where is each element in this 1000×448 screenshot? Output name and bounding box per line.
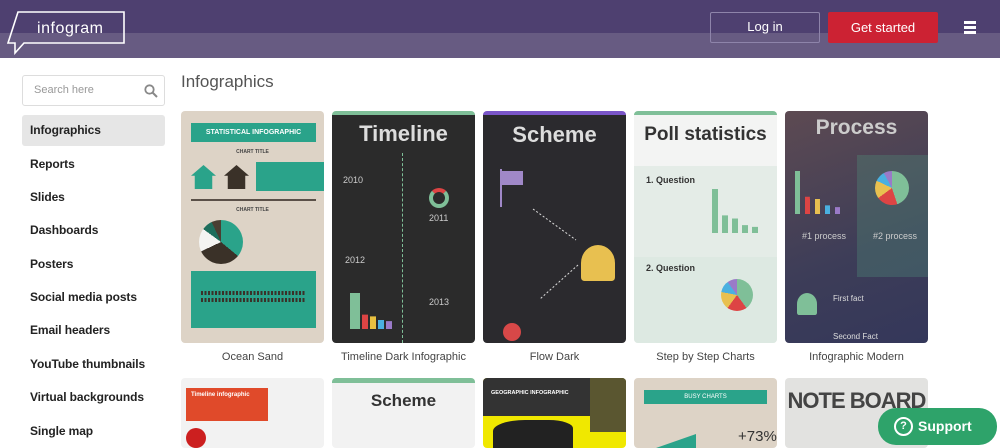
sidebar nav: YouTube thumbnails [30, 357, 145, 371]
heading: Infographics [181, 72, 274, 91]
card: timeline dark [332, 111, 475, 343]
card: timeline dark: 2013 [429, 297, 449, 307]
search box [22, 75, 165, 106]
card: process: First fact [833, 294, 864, 303]
icon: help [894, 417, 913, 436]
card: geographic: GEOGRAPHIC INFOGRAPHIC [491, 390, 569, 396]
card: timeline infographic: Timeline infographic [191, 392, 250, 398]
card: scheme: Scheme [371, 391, 436, 410]
card: busy charts: +73% [738, 428, 777, 445]
card: ocean sand: CHART TITLE [236, 149, 269, 155]
card: poll statistics: 1. Question [646, 175, 695, 185]
caption: timeline: Timeline Dark Infographic [341, 351, 466, 363]
card: ocean sand: STATISTICAL INFOGRAPHIC [206, 129, 301, 136]
card: timeline dark: 2012 [345, 255, 365, 265]
card: poll statistics: Poll statistics [644, 124, 767, 145]
card: process [785, 111, 928, 343]
card: timeline dark: 2010 [343, 175, 363, 185]
search box: Search here [34, 84, 94, 96]
caption: flow dark: Flow Dark [530, 351, 579, 363]
support button: Support [918, 418, 972, 434]
sidebar nav [22, 115, 165, 438]
sidebar nav: Social media posts [30, 290, 137, 304]
button: log in: Log in [747, 19, 783, 34]
icon: help: ? [900, 420, 907, 432]
card: geographic [483, 378, 626, 448]
header bar [0, 0, 1000, 58]
sidebar nav: Reports [30, 157, 75, 171]
card: poll statistics: 2. Question [646, 263, 695, 273]
sidebar nav: Dashboards [30, 223, 98, 237]
caption: process: Infographic Modern [809, 351, 904, 363]
sidebar nav: Slides [30, 190, 65, 204]
card: flow dark [483, 111, 626, 343]
sidebar nav: Virtual backgrounds [30, 390, 144, 404]
caption: ocean sand: Ocean Sand [222, 351, 283, 363]
caption: poll: Step by Step Charts [656, 351, 755, 363]
card: process: Process [816, 116, 897, 139]
card: timeline infographic [181, 378, 324, 448]
card: process: Second Fact [833, 332, 878, 341]
logo [6, 11, 125, 55]
card: note board [785, 378, 928, 448]
card: flow dark: Scheme [512, 122, 597, 147]
row 2 cards [181, 378, 928, 448]
sidebar nav: Single map [30, 424, 93, 438]
card: timeline dark: Timeline [359, 121, 448, 146]
icon: menu [964, 21, 976, 34]
card: timeline dark: 2011 [429, 213, 448, 223]
card: process: #1 process [802, 231, 846, 241]
card: ocean sand: CHART TITLE [236, 207, 269, 213]
card: scheme [332, 378, 475, 448]
sidebar nav: Posters [30, 257, 73, 271]
button: log in [710, 12, 820, 43]
button: get started [828, 12, 938, 43]
logo: infogram [37, 20, 103, 37]
support button [878, 408, 997, 445]
card: process: #2 process [873, 231, 917, 241]
card: ocean sand [181, 111, 324, 343]
card: poll statistics [634, 111, 777, 343]
button: get started: Get started [851, 20, 915, 35]
card: busy charts [634, 378, 777, 448]
sidebar nav: Email headers [30, 323, 110, 337]
sidebar nav: Infographics [30, 123, 101, 137]
card: note board: NOTE BOARD [788, 388, 925, 413]
card: busy charts: BUSY CHARTS [684, 394, 727, 400]
